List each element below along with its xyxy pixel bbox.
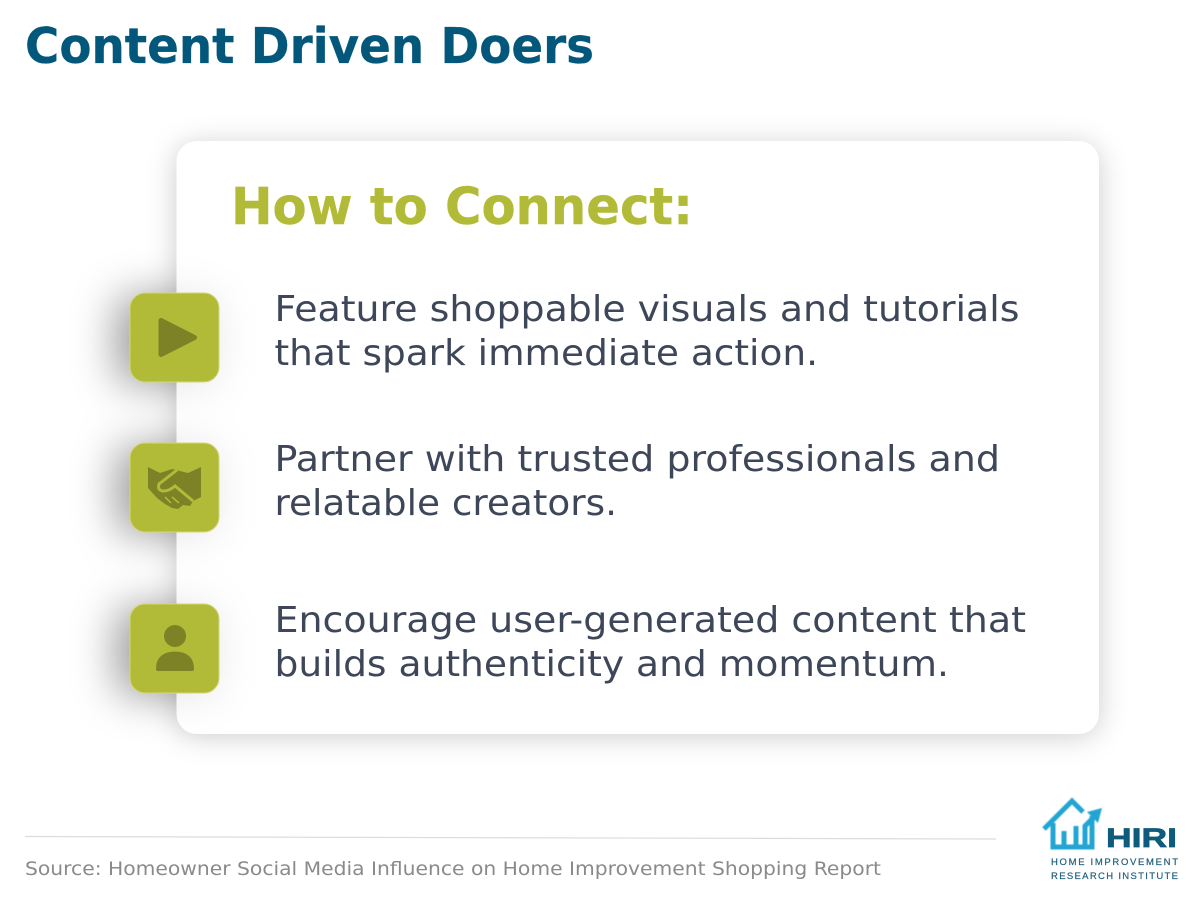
text block: user-generated content — [274, 600, 1026, 685]
logo tagline: RESEARCH INSTITUTE — [1051, 871, 1178, 882]
logo tagline: HOME IMPROVEMENT — [1051, 857, 1178, 868]
text block: shoppable visuals: Feature shoppable visuals and tutorials — [274, 289, 1020, 330]
panel heading: How to Connect: — [231, 178, 693, 237]
icon: person — [130, 604, 219, 693]
text block: trusted professionals: relatable creators. — [274, 483, 617, 524]
text block: trusted professionals — [274, 439, 1000, 524]
title: Content Driven Doers — [25, 18, 594, 75]
logo icon: house with arrow — [1044, 801, 1102, 847]
logo: HIRI — [1044, 801, 1178, 882]
icon: play — [130, 293, 219, 382]
text block: shoppable visuals — [274, 289, 1020, 374]
footer divider — [25, 836, 996, 839]
logo tagline — [1051, 857, 1178, 882]
text block: shoppable visuals: that spark immediate action. — [274, 333, 818, 374]
text block: trusted professionals: Partner with trusted professionals and — [274, 439, 1000, 480]
logo wordmark: HIRI — [1106, 823, 1177, 853]
panel: how to connect — [116, 141, 1099, 736]
icon: handshake — [130, 443, 219, 532]
icon shadows — [116, 295, 216, 696]
text block: user-generated content: Encourage user-generated content that — [274, 600, 1026, 641]
source note: Source: Homeowner Social Media Influence on Home Improvement Shopping Report — [25, 858, 881, 880]
text block: user-generated content: builds authenticity and momentum. — [274, 644, 949, 685]
